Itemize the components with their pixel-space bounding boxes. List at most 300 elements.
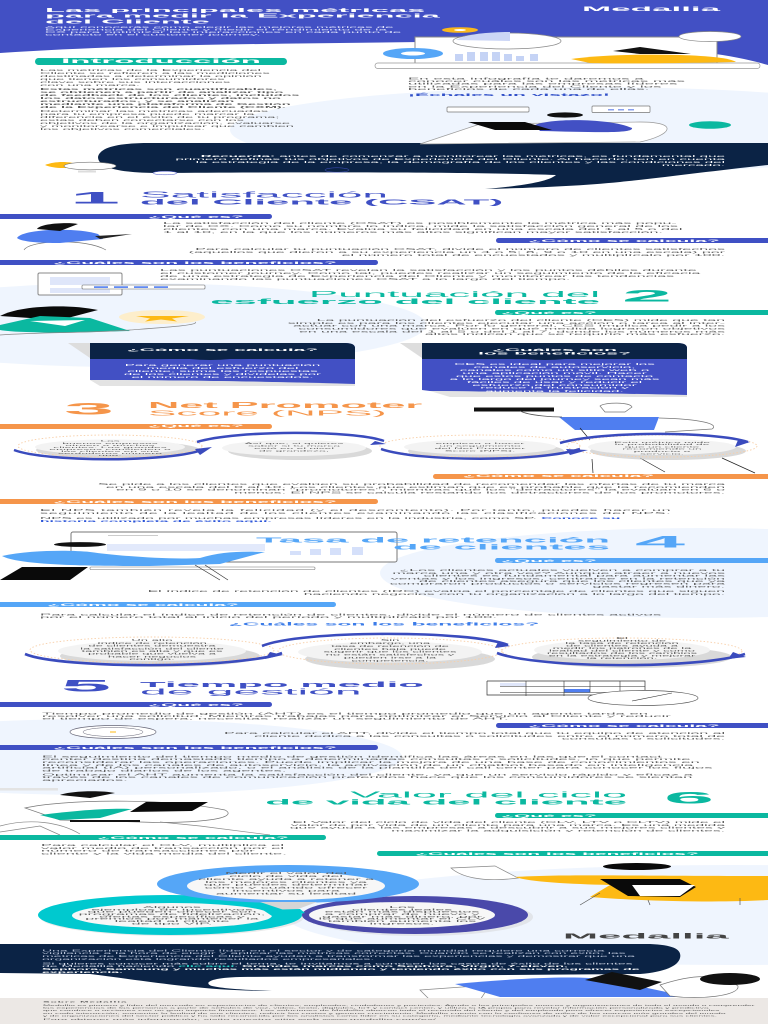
footer logo: Medallia: [563, 931, 729, 940]
title: [45, 7, 440, 25]
intro text paragraph 2: de feedback de los clientes, incluidos: [40, 94, 299, 97]
card 1 text: [124, 364, 321, 379]
intro text paragraph 3: estas deben conectarse con los: [40, 118, 244, 121]
icon: calendar and clock: [487, 681, 698, 706]
light blob: intro: [230, 87, 768, 173]
NPS text 4: servicio.: [640, 452, 684, 455]
retention text 2: no están satisfechos y: [326, 653, 454, 656]
section 5 how pill: [496, 723, 768, 728]
section 4 how pill: [0, 602, 336, 607]
section 6 number: 6: [664, 789, 714, 807]
retention text 1: [80, 639, 224, 660]
section 3 how pill: [433, 474, 768, 478]
section 6 how pill: ¿Cómo se calcula?: [97, 835, 289, 839]
section 1 number: 1: [70, 189, 120, 207]
NPS text 1: los clientes en sus: [61, 450, 159, 452]
intro text paragraph 2: mediante una plataforma de Gestión: [40, 103, 291, 106]
section 6 how text: [41, 843, 287, 855]
NPS text 4: [614, 441, 710, 455]
NPS text 2: saber si tu marca: [248, 444, 340, 447]
closing call to action: [42, 962, 640, 974]
closing call to action: Si quieres conocer más sobre el tema, te invitamos a conocer los casos de éxito de los clientes: [42, 962, 633, 965]
diagram: NPS chain: [14, 433, 757, 460]
section 4 benefits heading: ¿Cuáles son los beneficios?: [229, 622, 539, 626]
section 6 how text: valor medio de transacción por el: [41, 846, 284, 849]
card 2 text: CES es ideal para mejorar los: [454, 363, 655, 366]
CLV ring text top: incentivos para: [232, 889, 340, 892]
CLV ring text right: [302, 906, 502, 925]
intro text paragraph 1: clave sobre sus interacciones: [40, 80, 230, 83]
section 3 success link: historia completa de éxito aquí.: [40, 520, 272, 523]
section 4 how text: Para calcular el índice de retención de clientes, divide el número de clientes activos: [40, 613, 661, 616]
about text: y de organizaciones del sector público y ha sido reconocida por los analistas como líder en su categoría, mediante tecnología avanzada y de valor excepcional para sus clientes.: [43, 1015, 717, 1016]
section 3 title: [148, 401, 422, 417]
card 2 text: a lo largo del journey sean más: [450, 378, 659, 381]
section 5 benefits pill: ¿Cuáles son los beneficios?: [53, 745, 337, 749]
card 2 text: reduce la frustración y: [480, 386, 629, 390]
retention text 3: la retención.: [587, 657, 657, 660]
subtitle: CX para optimizar las interacciones en cada punto de: [45, 31, 401, 34]
NPS text 4: producto o: [634, 450, 690, 453]
section 5 benefits text: El seguimiento del tiempo medio de gestión identifica las áreas en las que el contact: [42, 754, 662, 758]
CLV ring text right: clientes leales: [352, 908, 452, 911]
section 6 how text: número de transacciones por: [41, 849, 255, 852]
section 5 benefits text: reconsiderar las operaciones. Puede implicar la mejora de una base de conocimientos en: [42, 760, 700, 763]
section 5 what pill: [0, 702, 272, 707]
retention text 2: competencia.: [351, 659, 429, 662]
navy reminder band: [98, 143, 768, 189]
retention text 2: sugerir que los clientes: [324, 651, 456, 653]
NPS text 1: Las: [100, 439, 120, 442]
NPS text 3: empieza a hacer: [436, 442, 524, 444]
retention text 1: también es alta y que es: [82, 649, 222, 652]
card 2 text: aumenta la felicidad.: [485, 389, 624, 392]
card 2 text: canales de autoservicio,: [474, 366, 635, 369]
section 5 what text: [42, 712, 671, 720]
section 4 what text: de clientes asegura que los clientes que ya: [419, 579, 725, 582]
CLV ring text right: lo que aumentar el CLV: [319, 917, 485, 920]
NPS text 2: Así que, si quieres: [245, 442, 343, 444]
retention text 1: de clientes demuestra: [88, 644, 216, 647]
intro text paragraph 3: para tu empresa puede marcar la: [40, 112, 254, 115]
CLV ring text top: [198, 871, 374, 895]
CLV ring text top: que puedes determinar: [204, 883, 368, 886]
intro text paragraph 2: los datos estructurados y datos no: [40, 97, 281, 100]
section 1 title: Satisfacción: [140, 189, 388, 199]
about text: las experiencias de las personas a partir de señales de voz, video, texto, digitales, IoT y contact center, y utiliza la IA propia para revelar información personalizada y predictiva: [43, 1007, 709, 1008]
section 5 title: de gestión: [140, 686, 362, 696]
section 1 benefits text: Las puntuaciones CSAT revelan la satisfacción y los puntos débiles durante: [160, 269, 697, 272]
section 5 what text: resolver una solicitud. Mientras trabajas para optimizar el Servicio al Cliente y reducir: [42, 714, 671, 718]
title: para medir la Experiencia: [45, 12, 440, 19]
section 2 title: esfuerzo del cliente: [210, 297, 600, 305]
CLV ring text top: ciclo de vida del: [229, 874, 343, 877]
section 4 how pill: ¿Cómo se calcula?: [47, 602, 239, 606]
intro text paragraph 1: Las métricas de la Experiencia del: [40, 69, 261, 71]
intro text paragraph 2: estructurados, y se analizan: [40, 100, 234, 103]
section 6 benefits pill: ¿Cuáles son los beneficios?: [415, 851, 699, 855]
title: Las principales métricas: [45, 7, 425, 13]
CLV ring text left: programas de fidelización,: [79, 912, 265, 916]
NPS text 4: la probabilidad de: [615, 443, 709, 446]
section 2 what text: La puntuación del esfuerzo del cliente (CES) mide qué tan: [317, 318, 725, 321]
section 6 title: [265, 789, 627, 805]
NPS text 1: atraen a muchos: [65, 443, 155, 446]
about text: Medallia es pionera y líder del mercado en experiencias de clientes, empleados, ciudadanos y pacientes. Ayuda a las principales marcas y organizaciones de todo el mundo a comprender: [43, 1004, 755, 1006]
card 2 text: una aplicación móvil. Hacer: [462, 372, 647, 375]
title: del Cliente: [45, 18, 210, 25]
section 5 closing text: través de los canales de comunicación preferidos hace que los consumidores se sientan: [42, 775, 692, 779]
section 4 how text: [40, 613, 661, 619]
section 1 title: [140, 189, 503, 206]
intro text paragraph 3: los objetivos comerciales.: [40, 127, 205, 130]
CLV ring text top: Medir el valor del: [225, 871, 347, 874]
section 2 what text: en una escala del 1 al 5 o del 1 al 7, donde los números más: [299, 330, 725, 333]
NPS text 4: que un cliente: [625, 445, 699, 448]
section 4 what text: clientes es fundamental para aumentar las: [423, 574, 725, 577]
closing text: vigilancia a la hora de elegir y aplicar las métricas correctas. Cuando se realizan con éxito, las: [42, 952, 626, 955]
card 1 text: el número de encuestados.: [131, 376, 314, 379]
card 2 text: [450, 363, 659, 392]
NPS text 4: Esta métrica mide: [614, 441, 710, 443]
light blob: section 4: [380, 528, 768, 618]
reminder text: primero definas tus objetivos de Experiencia del Cliente. Al hacerlo, ten en cuenta: [175, 157, 725, 160]
CLV ring text left: Algunos: [143, 905, 201, 908]
section 5 benefits text: center destina demasiado tiempo a determinadas consultas o solicitudes, lo que permite: [42, 757, 690, 760]
card 2 text: esfuerzo del consumidor: [472, 383, 637, 387]
card 2 text: canales como un sitio web o: [460, 369, 649, 372]
illustration: person with laptop: [420, 106, 731, 144]
CLV ring text right: están más dispuestos: [325, 910, 479, 913]
retention text 3: El: [616, 637, 628, 640]
section 2 what text: simple es para los clientes ejecutar una acción o tarea al inter-: [288, 321, 725, 324]
section 3 how text: en una escala del 0 al 10. Los clientes que estiman que es probable que la recomienden: [106, 485, 725, 488]
section 5 title: Tiempo medio: [140, 680, 424, 688]
card 2 text: fáciles de usar y reducir el: [467, 381, 642, 384]
section 5 how text: Para calcular el AHT, divide el tiempo total que tu equipo de atención al: [224, 732, 725, 735]
section 6 what text: que ayuda a las empresas a descubrir a sus mejores clientes y: [290, 826, 725, 829]
section 1 benefits pill: ¿Cuáles son los beneficios?: [53, 260, 337, 264]
illustration: person with laptop, teal shirt: [0, 788, 270, 835]
section 5 number: 5: [61, 677, 111, 695]
section 6 what pill: ¿Qué es?: [501, 813, 597, 817]
section 6 what text: maximizar la adquisición y retención de clientes.: [391, 829, 725, 832]
icon: light bulb: [45, 162, 349, 175]
card 1 text: media del esfuerzo del: [147, 367, 298, 370]
section 1 benefits text: [160, 269, 700, 281]
section 5 what text: Tiempo promedio de gestión (AHT) es el tiempo promedio que un agente tarda en: [42, 712, 648, 715]
section 1 what text: 1 al 10, en la que los números más altos significan mayor satisfacción.: [163, 231, 663, 234]
intro pill: Introducción: [61, 58, 261, 64]
section 1 how text: (aquellos que dieron a su experiencia un 4 o 5; 8, 9 o 10 en una escala) por: [189, 251, 725, 254]
section 1 how text: el número total de encuestados y multiplícalo por 100.: [342, 254, 725, 257]
section 6 benefits pill: [377, 851, 768, 856]
card 2 title: [478, 348, 631, 356]
NPS text 3: un seguimiento: [439, 444, 521, 447]
section 6 how text: Para calcular el CLV, multiplica el: [41, 843, 284, 846]
section 3 how text: [98, 483, 725, 494]
subtitle: contacto en el customer journey.: [45, 33, 261, 36]
section 1 what text: La satisfacción del cliente (CSAT) es posiblemente la métrica más popu-: [163, 222, 677, 225]
subtitle: [45, 26, 401, 36]
retention text 3: en la estrategia y mejorar: [549, 654, 695, 657]
section 1 how text: [189, 248, 725, 257]
section 3 benefits pill: [0, 499, 378, 504]
intro text paragraph 1: que tienen los consumidores: [40, 77, 225, 80]
CLV ring text left: [72, 906, 272, 925]
subtitle: Experiencia del Cliente y medir el rendimiento de la: [45, 28, 387, 31]
section 3 what pill: [0, 424, 272, 428]
illustration: woman with star: [0, 306, 205, 335]
card 1 text: de los clientes y divídelas por: [124, 373, 321, 376]
NPS text 2: está en el nivel: [254, 447, 334, 449]
retention text 1: índice de retención: [97, 641, 207, 644]
section 2 title: [210, 290, 600, 305]
light blob: section 2: [0, 283, 426, 367]
reminder text: [175, 154, 725, 166]
retention text 2: clientes baja puede: [334, 648, 446, 650]
section 4 title: Tasa de retención: [256, 535, 610, 544]
about heading: Sobre Medallia: [43, 1001, 128, 1003]
call to action: ¡Échales un vistazo!: [408, 93, 610, 97]
closing text: Una Experiencia del Cliente líder en el sector y de categoría mundial requiere una correcta: [42, 949, 605, 952]
NPS text 2: de grandeza,: [259, 449, 329, 452]
section 2 what pill: ¿Qué es?: [501, 310, 597, 314]
diagram: retention chain: [25, 634, 746, 670]
section 3 how pill: ¿Cómo se calcula?: [463, 474, 654, 478]
about text: [43, 1004, 755, 1017]
section 4 what pill: ¿Qué es?: [501, 558, 597, 562]
section 2 what text: consumidores que evalúen en qué medida lograron objetivos: [298, 327, 725, 330]
section 5 benefits pill: [0, 745, 378, 750]
closing call to action: experiencia.: [42, 971, 123, 974]
card: CES benefits: [400, 343, 687, 397]
section 4 what pill: [495, 558, 768, 563]
section 3 how text: Se pide a los clientes que evalúen su probabilidad de recomendar las ofertas de tu marca: [98, 483, 725, 486]
card 2 text: que estos puntos de contacto: [456, 375, 653, 378]
NPS text 1: uno.: [98, 454, 122, 456]
section 3 number: 3: [64, 400, 114, 418]
card: CES calculation: [68, 343, 355, 386]
section 6 title: Valor del ciclo: [350, 789, 627, 799]
intro text paragraph 3: Determinar las métricas adecuadas: [40, 110, 268, 112]
CLV ring text left: ofertas específicas y: [99, 915, 245, 918]
section 4 what text: compraron productos o servicios regresen para: [390, 582, 725, 585]
light blob: section 6 and bottom: [285, 865, 768, 965]
section 1 what text: lar de CX. Como su nombre lo indica, mide la satisfacción general de los: [163, 225, 678, 228]
section 4 retention index text: [148, 590, 725, 596]
intro text paragraph 2: Estas métricas son cuantificables,: [40, 88, 277, 91]
retention text 3: la tasa de retención: [565, 642, 679, 645]
CLV ring text left: que pueden ofrecer son: [87, 910, 256, 913]
section 2 what text: altos indican que se requirió más esfuerzo.: [425, 332, 725, 336]
retention text 2: pueden irse a la: [344, 656, 436, 659]
header band: [0, 0, 768, 65]
section 3 success link: [40, 517, 620, 523]
retention text 3: lealtad del cliente y como: [549, 649, 695, 652]
card 1 title: ¿Cómo se calcula?: [127, 348, 318, 352]
CLV ring text left: ejemplos de incentivos: [91, 908, 253, 911]
CLV ring text right: gastar más dinero, por: [322, 915, 482, 918]
retention text 3: medir los patrones de la: [553, 647, 691, 650]
card 1 text: cliente, suma las respuestas: [127, 370, 318, 373]
section 2 what text: [288, 318, 725, 336]
section 5 title: [140, 680, 424, 696]
section 6 what text: valor de por vida de un cliente para una marca. Es una medida: [291, 824, 725, 827]
section 1 benefits text: el customer journey. Como tal, puedes realizar un seguimiento de la eficacia: [160, 272, 700, 275]
section 1 what text: clientes con una marca. Evalúa su felicidad en una escala del 1 al 5 o del: [163, 228, 682, 231]
section 5 how pill: ¿Cómo se calcula?: [528, 723, 720, 727]
light blob: section 5: [0, 719, 402, 795]
retention text 1: contigo.: [129, 657, 175, 660]
retention text 1: Un alto: [131, 639, 173, 641]
about text: que conduce a acciones con un gran impacto financiero. Las soluciones de Medallia abarcan todo el recorrido del cliente y del empleado para ofrecer experiencias excepcionales: [43, 1009, 719, 1011]
section 4 what text: ventas y los ingresos, centrarse en la retención: [391, 577, 725, 580]
section 1 title: del Cliente (CSAT): [140, 197, 503, 205]
section 5 closing text: [42, 773, 693, 782]
section 5 benefits text: [42, 754, 713, 772]
section 6 what pill: [495, 813, 768, 818]
intro text paragraph 3: diferencia en el éxito de tu programa;: [40, 115, 279, 118]
section 5 benefits text: de trabajo diarios de los agentes.: [42, 768, 286, 772]
section 5 how text: [224, 732, 725, 740]
section 4 title: [256, 535, 610, 551]
section 3 benefits text: El NPS también revela la felicidad (y el descontento). Por tanto, puedes hacer un: [40, 509, 671, 512]
intro text paragraph 1: [40, 69, 270, 86]
intro text paragraph 3: y monitorearse e impulsar que cambien: [40, 124, 294, 127]
icon: round clock: [70, 726, 156, 738]
section 1 how pill: [496, 238, 768, 243]
illustration: person with telescope: [474, 403, 755, 473]
CLV ring text top: los mejores clientes ya: [205, 880, 367, 883]
section 2 what pill: [495, 310, 768, 315]
card 2 title: los beneficios?: [478, 351, 631, 356]
section 4 what text: ¿Los clientes actuales vuelven a comprar a tu: [400, 569, 725, 572]
section 1 what pill: ¿Qué es?: [148, 214, 244, 218]
section 3 benefits text: [40, 509, 671, 515]
retention text 3: de clientes ayuda a: [566, 644, 678, 647]
section 5 how text: cliente dedica a las consultas o solicitudes entre el número total de: [254, 735, 725, 738]
NPS text 1: [49, 439, 171, 456]
card 2 title: ¿Cuáles son: [492, 348, 617, 352]
CLV ring text left: de tipo VIP.: [132, 922, 212, 925]
intro text paragraph 3: objetivos de la organización, evaluarse: [40, 121, 290, 124]
CLV ring text top: cliente ayuda a retener a: [198, 877, 374, 880]
NPS text 1: clientes. Las grandes: [53, 445, 167, 448]
illustration: woman with phone: [17, 223, 132, 250]
section 5 benefits text: artificial (IA) personalizado, o el análisis de la plantilla del call center para conocer los flujos: [42, 765, 713, 769]
section 5 benefits text: línea y de los canales de autoservicio, la activación de un chatbot basado en inteligencia: [42, 763, 693, 766]
section 2 title: Puntuación del: [309, 290, 600, 298]
CLV ring text right: ingresos.: [370, 922, 434, 925]
NPS text 3: del Net Promoter: [435, 447, 525, 449]
retention text 1: hacer negocios: [108, 655, 196, 657]
footer band: [0, 998, 768, 1024]
CLV ring text top: cómo y cuándo ofrecer: [205, 886, 367, 889]
CLV ring text top: aumentar su lealtad: [216, 892, 356, 895]
section 3 how text: menos. El NPS se calcula restando los detractores de los promotores.: [234, 491, 725, 494]
NPS text 3: [435, 442, 526, 452]
section 6 what text: El Valor del ciclo de vida del cliente (CLV, LTV o CLTV) mide el: [292, 821, 725, 824]
section 1 what text: [163, 222, 682, 234]
CLV ring text right: Los: [389, 905, 415, 908]
NPS text 1: verdaderos número: [58, 452, 162, 454]
navy closing banner: [0, 944, 680, 991]
section 4 how text: por el número total al inicio del período y multiplícalo por 100.: [40, 615, 497, 619]
retention text 3: resultados de los cambios: [547, 652, 697, 655]
NPS text 1: buenas empresas: [62, 441, 158, 444]
intro text paragraph 2: de la Experiencia del Cliente (CXM).: [40, 106, 286, 109]
retention text 2: tasa de retención de: [331, 645, 449, 647]
intro text paragraph 2: se obtienen a partir de analizar tipo: [40, 91, 283, 94]
section 4 what text: gastar más dinero.: [592, 585, 725, 588]
NPS text 1: empresas convierten a: [49, 448, 171, 450]
section 3 how text: en 9 o 10 se denominan "promotores", mientras que los "detractores" la evalúan en 6 o: [116, 488, 725, 491]
retention text 2: Sin: [381, 639, 399, 642]
section 1 how text: Para calcular tu puntuación CSAT, divide el número de clientes satisfechos: [195, 248, 725, 251]
card 1 text: Para generar una puntuación: [125, 364, 320, 367]
about link: Para obtener más información, visita nuestro sitio web www.medallia.com/es/: [43, 1018, 436, 1020]
intro text paragraph 2: [40, 88, 299, 109]
CLV ring text left: premios por mantener la: [85, 917, 259, 920]
closing call to action: de Medallia haciendo clic aquí. Grandes marcas como Sephora, Virgin, 7-eleven,: [42, 965, 568, 968]
section 1 benefits text: de una estrategia de Experiencia del Cliente y monitorear las tendencias: [160, 275, 674, 278]
section 4 title: de clientes: [393, 543, 610, 551]
section 3 benefits pill: ¿Cuáles son los beneficios?: [53, 499, 337, 503]
illustration: reclining person: [420, 972, 760, 1000]
closing call to action: Sephora, Samsung y muchas más están midiendo y teniendo éxito con sus programas de: [42, 968, 640, 971]
section 1 benefits text: examinando las puntuaciones CSAT a lo largo del tiempo.: [160, 278, 570, 281]
CLV ring text right: a comprar de nuevo y: [325, 912, 479, 916]
section 5 how text: consultas o solicitudes.: [562, 737, 725, 740]
NPS text 4: recomiende un: [622, 448, 702, 450]
section 2 number: 2: [622, 287, 672, 305]
section 4 what text: [390, 569, 725, 588]
section 3 what pill: ¿Qué es?: [148, 424, 244, 428]
section 2 what text: actuar con una marca. Por lo general, CES implica pedir a los: [293, 324, 725, 327]
section 5 what pill: ¿Qué es?: [148, 702, 244, 706]
intro right text: [408, 77, 685, 91]
intro right text: utilizadas para las empresas líderes: [408, 82, 677, 85]
reminder text: la estrategia de la empresa, la demografía de los clientes y las condiciones del: [196, 160, 725, 163]
section 3 title: Net Promoter: [148, 401, 422, 410]
NPS text 3: Score (NPS).: [445, 449, 515, 452]
NPS text 2: [244, 442, 343, 452]
retention text 2: [324, 639, 456, 662]
section 1 benefits pill: [0, 260, 378, 265]
retention text 3: [547, 637, 697, 660]
CLV ring text left: lealtad al cliente: [115, 919, 229, 923]
section 1 how pill: ¿Cómo se calcula?: [528, 238, 720, 242]
retention text 2: embargo, una: [350, 642, 430, 645]
section 3 benefits text: seguimiento de la lealtad de los clientes examinando las clasificaciones del NPS.: [40, 512, 671, 515]
reminder text: Recuerda: antes de comenzar a monitorear las métricas, es fundamental que: [201, 154, 725, 157]
intro text paragraph 1: con una marca.: [40, 83, 140, 86]
subtitle: Aquí conocerás cómo elegir las mejores métricas de: [45, 26, 394, 29]
intro text paragraph 3: [40, 110, 294, 130]
section 5 closing text: apreciados.: [42, 778, 128, 782]
intro right text: En esta infografía te daremos a: [408, 77, 644, 80]
section 1 what pill: [0, 214, 272, 219]
retention text 1: probable que vuelva a: [88, 652, 216, 655]
retention text 3: seguimiento de: [578, 639, 666, 642]
CLV ring text right: también aumenta los: [328, 919, 476, 923]
retention text 1: la satisfacción del cliente: [80, 647, 224, 649]
reminder text: mercado.: [662, 163, 725, 166]
section 4 retention index text: El índice de retención de clientes (IRC) evalúa el porcentaje de clientes que siguen: [148, 590, 725, 593]
about text: en cada interacción, aumentar la lealtad de sus clientes, reducir los costos y generar crecimiento. Medallia cuenta con la confianza de miles de las marcas más grandes del mundo: [43, 1012, 726, 1014]
section 5 what text: el tiempo de espera, necesitas realizar un seguimiento de AHT.: [42, 717, 509, 720]
